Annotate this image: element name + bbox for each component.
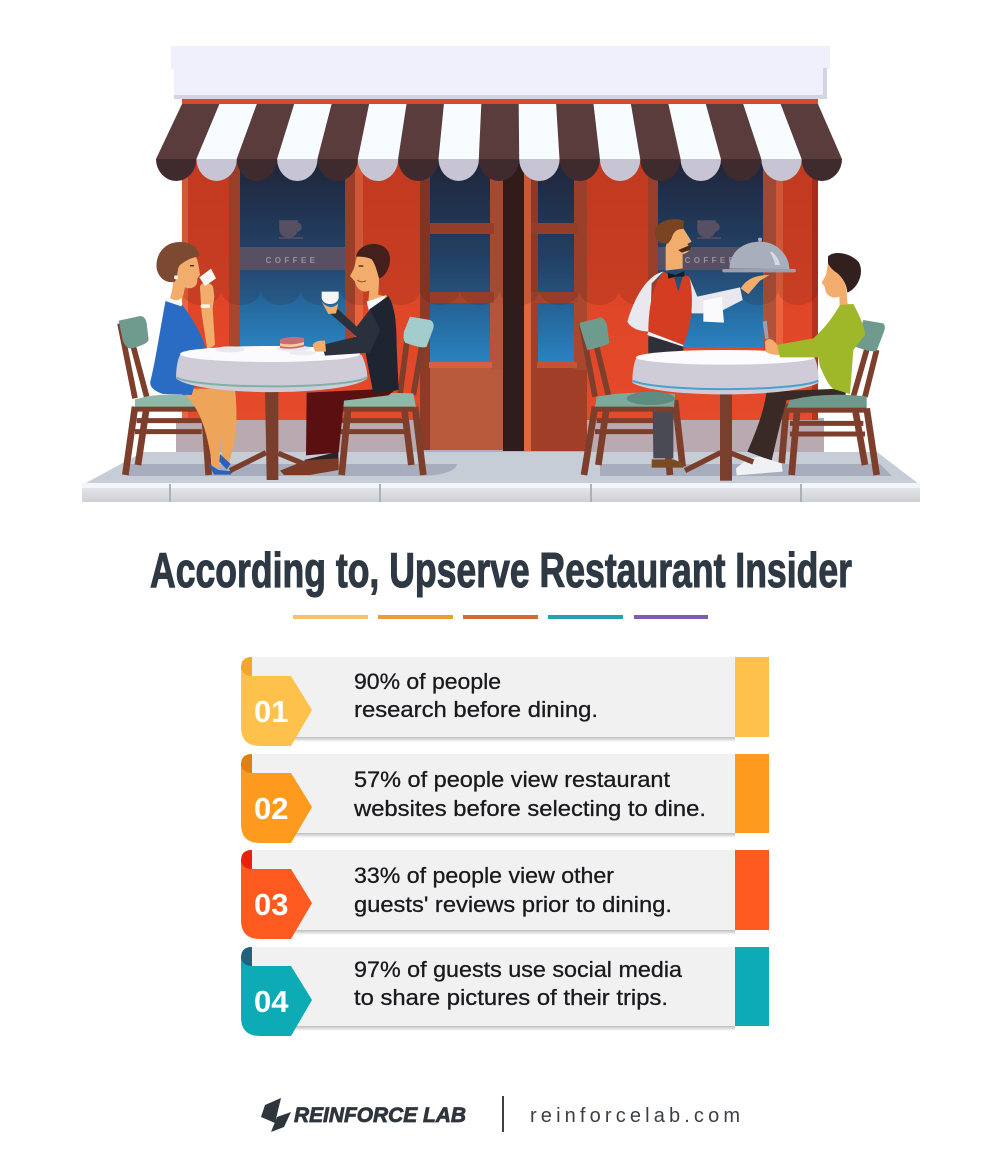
left table scene xyxy=(119,242,434,480)
sidewalk xyxy=(82,452,920,502)
chair: right xyxy=(332,317,434,475)
row 04 panel shadow xyxy=(295,1026,735,1031)
man's legs xyxy=(280,388,397,475)
row 04 panel xyxy=(252,947,735,1026)
row 01 panel shadow xyxy=(295,737,735,742)
awning shadow xyxy=(181,100,818,305)
row 03 panel shadow xyxy=(295,930,735,935)
row 03 text: 33% of people view other xyxy=(354,863,614,888)
row 03 number badge xyxy=(241,850,312,939)
chair: customer side xyxy=(782,320,885,475)
seats in front of figures xyxy=(595,392,867,413)
woman with cup xyxy=(150,242,236,475)
row 02 accent block xyxy=(735,754,769,833)
row 02 text: websites before selecting to dine. xyxy=(353,796,706,821)
waiter with cloche xyxy=(627,219,796,468)
row 02 number: 02 xyxy=(254,791,288,826)
building base xyxy=(176,418,824,454)
right table scene xyxy=(580,219,885,481)
footer divider xyxy=(502,1096,504,1132)
row 04 number badge xyxy=(241,947,312,1036)
row 04 text: to share pictures of their trips. xyxy=(354,985,668,1010)
row 01 badge fold xyxy=(241,657,252,676)
left window xyxy=(229,160,363,350)
title divider: five coloured bars xyxy=(293,615,708,619)
row 03 panel xyxy=(252,850,735,930)
row 04 xyxy=(241,947,769,1036)
chair: waiter side xyxy=(580,317,683,475)
table with cloth xyxy=(632,350,819,481)
row 02 xyxy=(241,754,769,843)
row 04 badge fold xyxy=(241,947,252,966)
double door xyxy=(420,160,587,451)
website url: reinforcelab.com xyxy=(530,1105,740,1127)
footer xyxy=(261,1096,740,1132)
row 01 accent block xyxy=(735,657,769,737)
striped awning xyxy=(156,104,842,181)
storefront wall xyxy=(182,100,818,420)
man's upper body with cup xyxy=(313,244,399,393)
row 02 text: 57% of people view restaurant xyxy=(354,767,670,792)
left window: COFFEE xyxy=(266,256,318,265)
table with cloth and cake xyxy=(176,337,367,480)
row 02 panel shadow xyxy=(295,833,735,838)
right window xyxy=(648,160,783,350)
row 01 text: research before dining. xyxy=(354,697,598,722)
customer's legs xyxy=(736,388,847,475)
row 01 number: 01 xyxy=(254,694,288,729)
row 02 badge fold xyxy=(241,754,252,773)
row 01 panel xyxy=(252,657,735,737)
row 04 accent block xyxy=(735,947,769,1026)
row 01 xyxy=(241,657,769,746)
chair: left xyxy=(119,316,211,475)
row 01 number badge xyxy=(241,657,312,746)
row 03 text: guests' reviews prior to dining. xyxy=(354,892,672,917)
row 02 panel xyxy=(252,754,735,833)
row 04 number: 04 xyxy=(254,984,289,1019)
row 03 number: 03 xyxy=(254,887,288,922)
illustration: restaurant storefront scene xyxy=(82,46,920,502)
logo icon xyxy=(261,1098,291,1132)
row 03 accent block xyxy=(735,850,769,930)
row 04 text: 97% of guests use social media xyxy=(354,957,683,982)
row 01 text: 90% of people xyxy=(354,669,501,694)
roof fascia xyxy=(171,46,830,104)
customer's upper body in green hoodie xyxy=(763,253,865,394)
row 02 number badge xyxy=(241,754,312,843)
row 03 badge fold xyxy=(241,850,252,869)
logo wordmark: REINFORCE LAB xyxy=(294,1104,466,1127)
row 03 xyxy=(241,850,769,939)
right window: COFFEE xyxy=(685,256,737,265)
